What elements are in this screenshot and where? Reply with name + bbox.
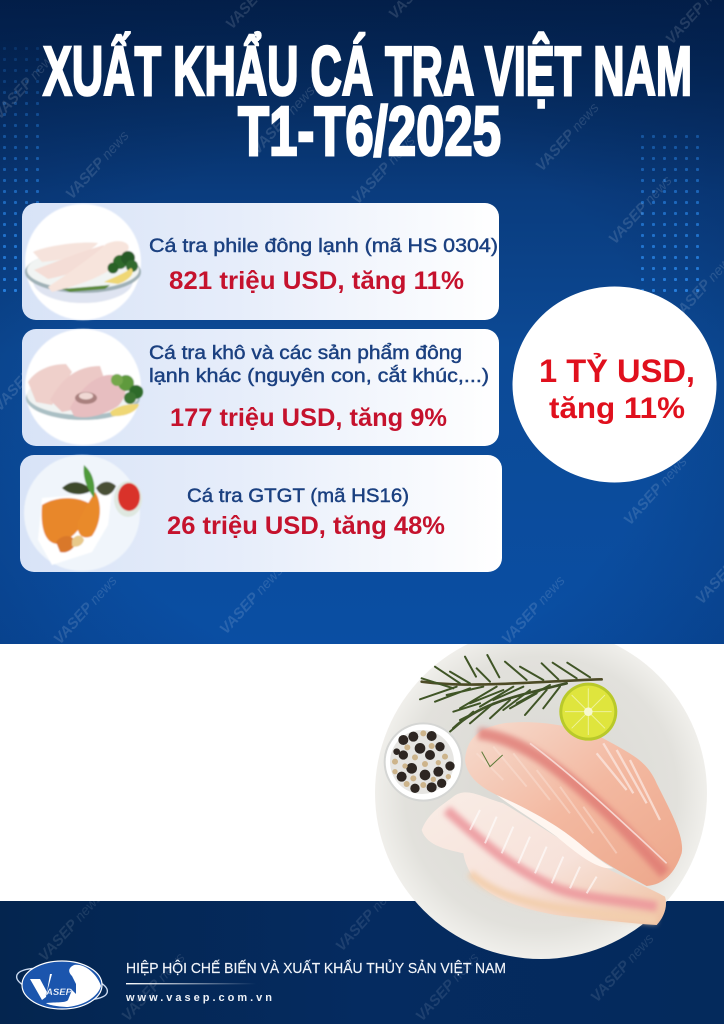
logo: VASEP [14,961,110,1009]
panel: dried and other frozen [22,329,499,446]
footer background: VASEP news [118,949,189,1024]
panel: frozen fillet [22,203,499,320]
fillet: upper [465,722,682,886]
title: T1-T6/2025 [238,92,501,170]
icon: frozen fillet plate [25,204,141,320]
icon: fried fish plate [24,455,142,571]
footer website: www.vasep.com.vn [125,992,272,1004]
footer organisation name: HIỆP HỘI CHẾ BIẾN VÀ XUẤT KHẨU THỦY SẢN VIỆT NAM [126,959,506,977]
watermarks: VASEP news: VASEP news [620,453,691,529]
garnish: lime [559,683,617,741]
label: frozen fillet name: Cá tra phile đông lạnh (mã HS 0304) [149,235,498,257]
photo: fish fillets on plate [375,627,707,959]
garnish: rosemary [420,655,602,732]
footer background: VASEP news [412,949,483,1024]
blue header background [0,0,724,644]
watermarks: VASEP news: VASEP news [532,99,603,175]
label: value added name: Cá tra GTGT (mã HS16) [187,485,409,507]
watermarks: VASEP news: VASEP news [248,82,319,158]
logo: VASEP: ASEP [45,987,73,998]
white band [0,644,724,901]
watermarks: VASEP news: VASEP news [605,172,676,248]
watermarks: VASEP news: VASEP news [498,572,569,648]
value: 821 million USD: 821 triệu USD, tăng 11% [169,267,464,295]
label: dried and other frozen name [149,342,489,387]
garnish: peppercorn bowl [384,722,463,802]
fillet: lower [422,792,666,925]
footer background: VASEP news [332,879,403,955]
callout: total value: tăng 11% [549,392,685,425]
title [43,31,692,170]
label: dried and other frozen name: lạnh khác (nguyên con, cắt khúc,...) [149,364,489,387]
watermarks: VASEP news: VASEP news [348,132,419,208]
watermarks: VASEP news: VASEP news [62,127,133,203]
watermarks: VASEP news: VASEP news [216,562,287,638]
value: 26 million USD: 26 triệu USD, tăng 48% [167,512,445,540]
label: dried and other frozen name: Cá tra khô và các sản phẩm đông [149,342,462,364]
panel: value added [20,455,502,572]
footer background: VASEP news [587,930,658,1006]
value: 177 million USD: 177 triệu USD, tăng 9% [170,404,447,432]
watermarks: VASEP news [0,0,724,648]
watermarks: VASEP news: VASEP news [50,572,121,648]
footer background: VASEP news [35,889,106,965]
callout: total value: 1 TỶ USD, [539,353,695,389]
icon: fish steaks plate [25,329,143,445]
callout: total value [512,286,716,482]
footer background [0,879,724,1024]
